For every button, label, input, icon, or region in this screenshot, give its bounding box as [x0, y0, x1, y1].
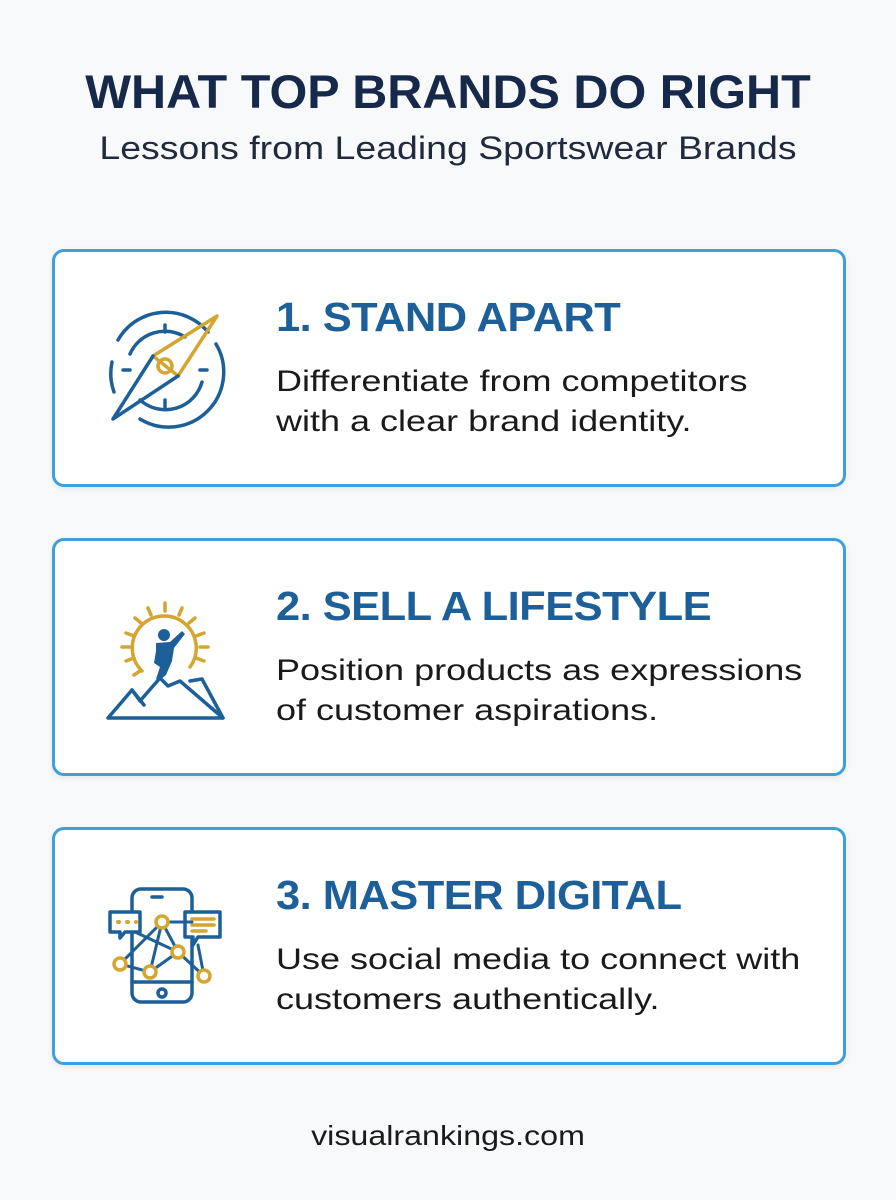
- icon: compass: [109, 310, 226, 429]
- icon: mountain climber: [106, 601, 225, 720]
- panel: stand apart: [52, 249, 846, 487]
- text: Use social media to connect with: [276, 943, 800, 976]
- footer: visualrankings.com: [311, 1120, 585, 1151]
- text: with a clear brand identity.: [276, 405, 692, 438]
- text: Position products as expressions: [276, 654, 802, 687]
- panel: master digital: [52, 827, 846, 1065]
- text: [276, 365, 748, 438]
- text: of customer aspirations.: [276, 694, 658, 727]
- text: Differentiate from competitors: [276, 365, 748, 398]
- panel: sell a lifestyle: [52, 538, 846, 776]
- icon: phone network: [108, 887, 222, 1004]
- title: WHAT TOP BRANDS DO RIGHT: [85, 65, 811, 118]
- text: [276, 654, 802, 727]
- text: [276, 943, 800, 1016]
- heading: 1. STAND APART: [276, 294, 620, 340]
- heading: 3. MASTER DIGITAL: [276, 872, 681, 918]
- text: customers authentically.: [276, 983, 660, 1016]
- subtitle: Lessons from Leading Sportswear Brands: [99, 130, 797, 166]
- heading: 2. SELL A LIFESTYLE: [276, 583, 711, 629]
